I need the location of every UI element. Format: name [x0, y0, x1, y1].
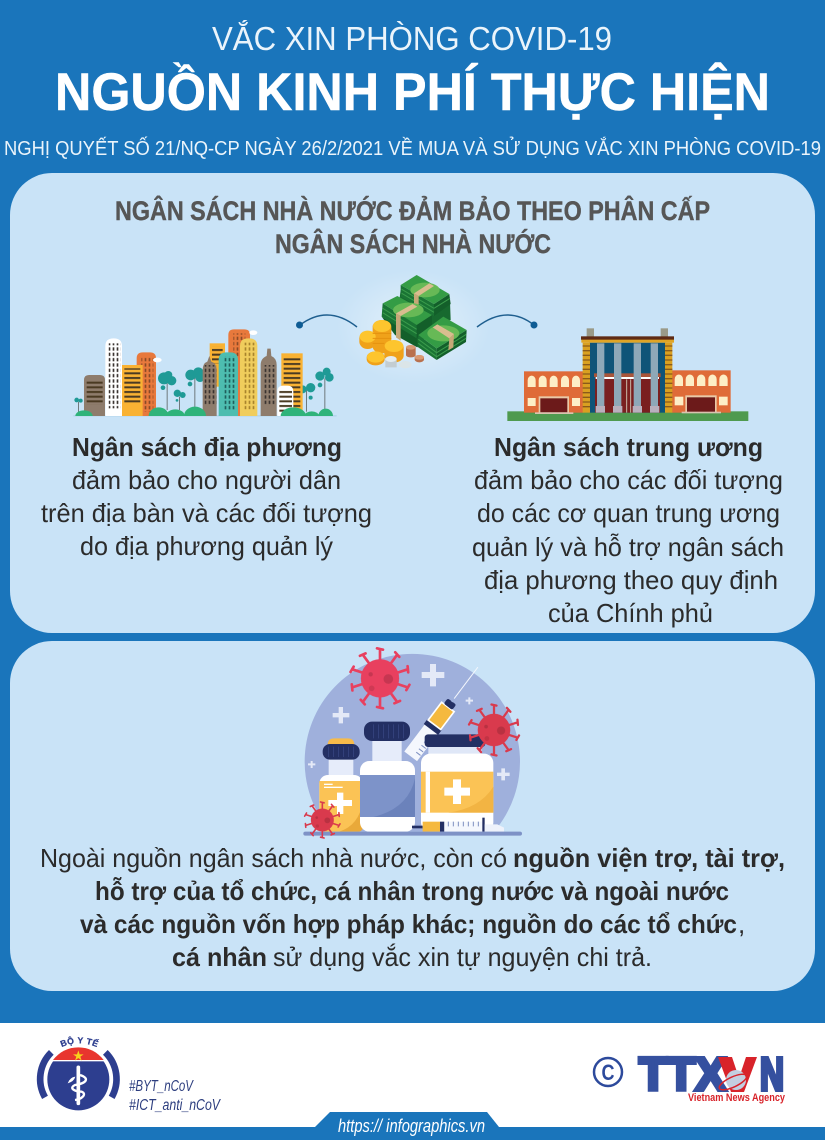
- panel heading: NGÂN SÁCH NHÀ NƯỚC: [275, 228, 551, 259]
- logo: TTXVN: Vietnam News Agency: [688, 1092, 786, 1104]
- copyright symbol: C: [602, 1060, 615, 1085]
- text: other funding sources: Ngoài nguồn ngân sách nhà nước, còn có: [40, 843, 507, 873]
- arrow: arc to central budget: [477, 315, 538, 328]
- hashtags: [129, 1078, 221, 1114]
- text: local budget: [41, 432, 372, 561]
- logo: Ministry of Health: BỘ Y TẾ: [60, 1036, 100, 1048]
- footer: [0, 1023, 825, 1127]
- title: top line: VẮC XIN PHÒNG COVID-19: [212, 20, 612, 57]
- panel: state budget: [10, 173, 815, 633]
- logo: TTXVN: TTX: [639, 1048, 726, 1100]
- panel: other funding sources: [10, 641, 815, 991]
- text: other funding sources: hỗ trợ của tổ chức, cá nhân trong nước và ngoài nước: [95, 876, 729, 906]
- icon: small syringe: [412, 818, 504, 832]
- text: local budget: do địa phương quản lý: [80, 531, 333, 561]
- panel heading: [115, 194, 710, 259]
- panel heading: NGÂN SÁCH NHÀ NƯỚC ĐẢM BẢO THEO PHÂN CẤP: [115, 194, 710, 226]
- text: other funding sources: cá nhân: [172, 942, 267, 972]
- text: central budget: địa phương theo quy định: [484, 565, 778, 595]
- text: central budget: Ngân sách trung ương: [494, 432, 763, 462]
- icon: virus top: [351, 648, 409, 708]
- base shelf: [303, 832, 522, 836]
- title block: [4, 20, 821, 160]
- text: other funding sources: nguồn viện trợ, tài trợ,: [513, 843, 785, 873]
- icon: large syringe: [403, 662, 485, 762]
- text: central budget: [472, 432, 784, 628]
- text: central budget: quản lý và hỗ trợ ngân sách: [472, 532, 784, 562]
- text: central budget: đảm bảo cho các đối tượng: [474, 465, 783, 495]
- text: other funding sources: ,: [738, 909, 745, 939]
- icon: middle bottle: [360, 722, 415, 832]
- text: other funding sources: và các nguồn vốn hợp pháp khác; nguồn do các tổ chức: [80, 909, 737, 939]
- icon: large jar: [421, 734, 493, 832]
- title: main heading: NGUỒN KINH PHÍ THỰC HIỆN: [55, 61, 770, 122]
- arrow: arc to local budget: [296, 315, 357, 328]
- icon: vaccine bottles, syringes and viruses: [303, 648, 522, 838]
- hashtags: #ICT_anti_nCoV: [129, 1097, 221, 1114]
- text: local budget: trên địa bàn và các đối tượng: [41, 498, 372, 528]
- website tab: https:// infographics.vn: [338, 1116, 485, 1136]
- icon: virus bottom left: [305, 802, 340, 838]
- icon: virus right: [469, 704, 519, 755]
- icon: government building: [507, 328, 748, 421]
- text: other funding sources: [40, 843, 785, 972]
- icon: city skyline: [73, 329, 337, 416]
- hashtags: #BYT_nCoV: [129, 1078, 194, 1095]
- logo: TTXVN: [639, 1048, 786, 1104]
- text: local budget: Ngân sách địa phương: [72, 432, 342, 462]
- text: local budget: đảm bảo cho người dân: [72, 465, 341, 495]
- text: central budget: của Chính phủ: [548, 598, 713, 628]
- text: other funding sources: sử dụng vắc xin tự nguyện chi trả.: [273, 942, 652, 972]
- logo: TTXVN: N: [760, 1048, 784, 1100]
- text: central budget: do các cơ quan trung ương: [477, 498, 780, 528]
- logo: Ministry of Health: [36, 1036, 120, 1110]
- copyright symbol: [594, 1058, 622, 1086]
- website tab: [0, 1112, 825, 1140]
- icon: left vial: [319, 738, 363, 832]
- icon: money stacks and coins: [337, 270, 490, 383]
